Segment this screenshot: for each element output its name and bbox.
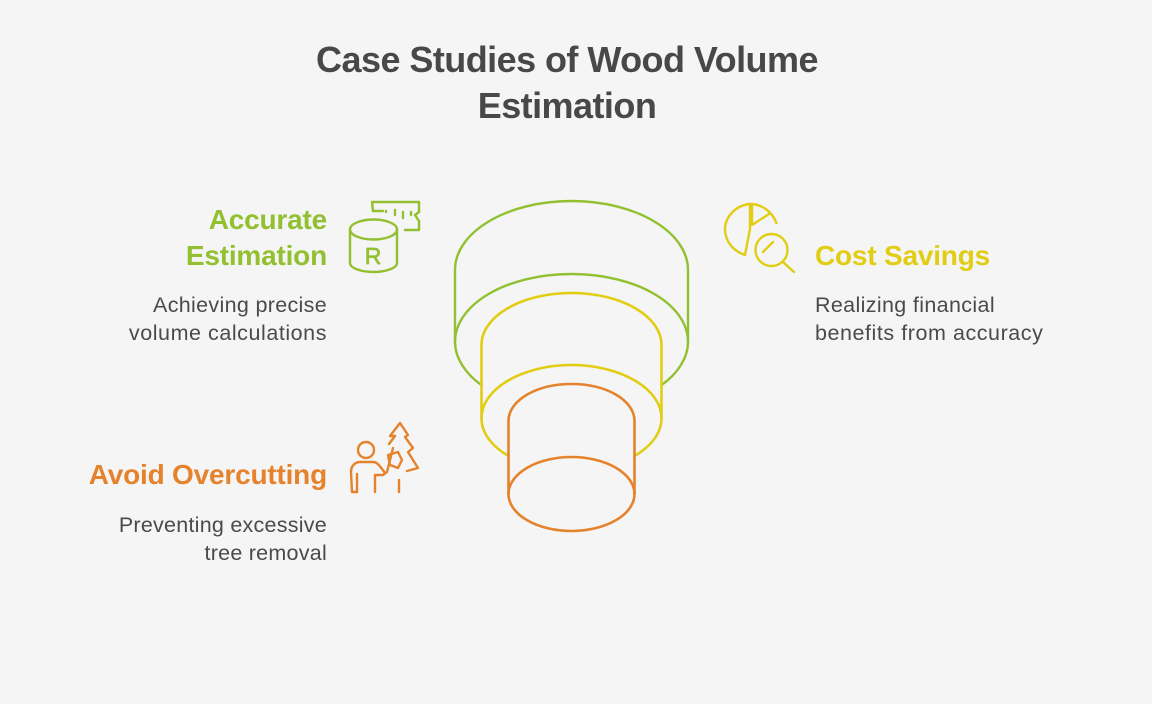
text: Avoid Overcutting description: Preventing excessive	[119, 513, 327, 537]
heading: Accurate Estimation: Accurate	[209, 204, 327, 235]
text: Avoid Overcutting description: tree removal	[204, 540, 327, 564]
cylinder: yellow	[482, 293, 662, 456]
icon: database and ticket	[350, 202, 419, 272]
heading: Avoid Overcutting: Avoid Overcutting	[89, 459, 327, 490]
text: Cost Savings description	[815, 293, 1043, 344]
heading: Accurate Estimation: Estimation	[186, 240, 327, 271]
text: Cost Savings description: benefits from accuracy	[815, 320, 1043, 344]
heading: Accurate Estimation	[186, 204, 327, 271]
title: Estimation	[478, 85, 656, 126]
text: Accurate Estimation description: Achieving precise	[153, 293, 327, 317]
icon: pie chart with magnifier	[725, 204, 794, 272]
icon: person with axe and tree	[351, 423, 418, 492]
icon: database letter: R	[365, 243, 381, 269]
text: Avoid Overcutting description	[119, 513, 327, 564]
cylinder: green	[455, 201, 688, 385]
text: Cost Savings description: Realizing financial	[815, 293, 995, 317]
heading: Cost Savings: Cost Savings	[815, 240, 990, 271]
cylinder: orange	[508, 384, 634, 531]
title	[316, 39, 818, 126]
title: Case Studies of Wood Volume	[316, 39, 818, 80]
text: Accurate Estimation description: volume calculations	[129, 320, 327, 344]
text: Accurate Estimation description	[129, 293, 327, 344]
